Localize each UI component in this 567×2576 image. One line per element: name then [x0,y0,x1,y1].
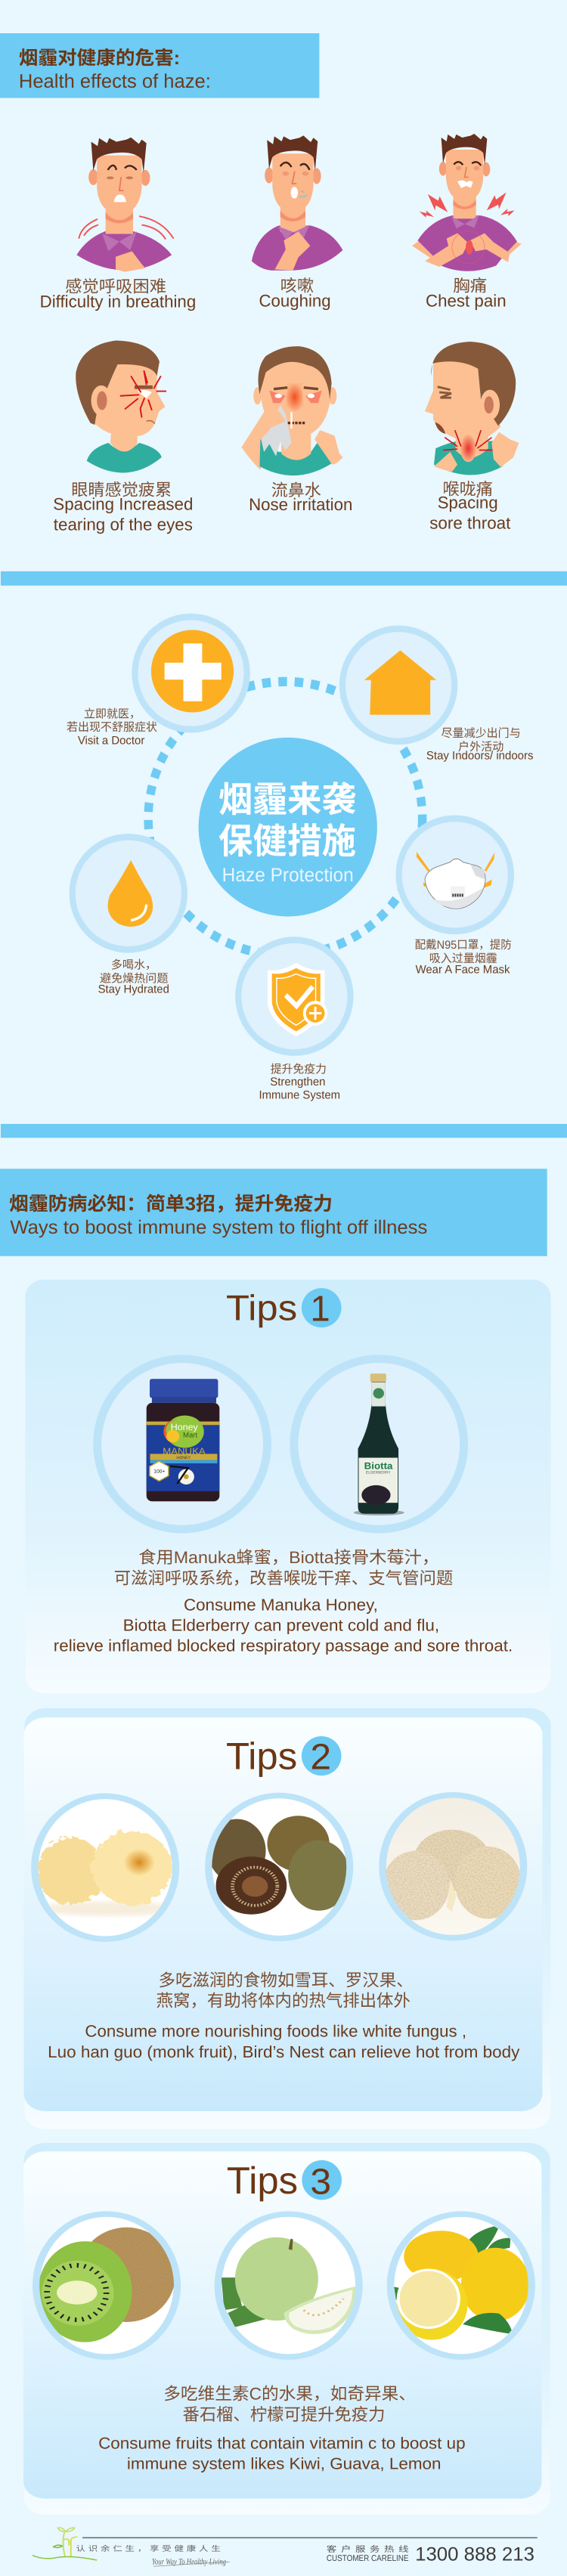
figure: sore throat [425,342,519,475]
label: chest pain: 胸痛 [453,276,487,295]
tips 1 heading [226,1288,342,1329]
label: nose irritation: Nose irritation [249,494,352,514]
heading band: ways to boost immune system: 烟霾防病必知：简单3招，提升免疫力 [9,1193,333,1214]
photo: kiwi [36,2214,177,2357]
label: nose irritation: 流鼻水 [271,481,321,500]
label: coughing: 咳嗽 [280,276,314,295]
label: chest pain: Chest pain [426,291,507,310]
measure: stay indoors: Stay Indoors/ indoors [426,749,533,762]
measure: stay hydrated: 避免燥热问题 [100,972,168,985]
measure: wear a face mask: 配戴N95口罩，提防 [415,939,512,951]
figure: difficulty in breathing [76,138,174,272]
tips 3 text [98,2384,466,2472]
label: eye fatigue: Spacing Increased [53,494,193,513]
product: manuka honey jar: MANUKA [163,1446,206,1457]
label: sore throat [429,479,510,532]
tips 1 text: 可滋润呼吸系统，改善喉咙干痒、支气管问题 [114,1569,453,1588]
photo: bird's nest [383,1795,524,1938]
tagline: 认识余仁生，享受健康人生 [76,2544,221,2553]
tips 3 heading: Tips [227,2160,298,2202]
footer [33,2528,538,2566]
heading band: health effects [0,33,319,98]
measure: visit a doctor [67,617,247,747]
section: tips 3 and footer [23,2143,550,2566]
label: sore throat: sore throat [429,513,510,532]
centre circle: haze protection [199,738,377,916]
product: manuka honey jar: Mart [183,1432,197,1439]
centre circle: haze protection: 烟霾来袭 [218,780,356,819]
label: difficulty in breathing: 感觉呼吸困难 [65,277,166,296]
panel: tips 1 [25,1280,550,1693]
tips 3 heading: 3 [310,2161,331,2202]
product: biotta elderberry bottle: ELDERBERRY [366,1471,391,1475]
panel: tips 3 [23,2143,550,2515]
section: tips 2 [24,1708,550,2129]
measure: stay hydrated [73,837,184,995]
logo: green sprout [33,2528,97,2560]
footer rule [82,2537,538,2538]
heading band: ways to boost immune system: Ways to boost immune system to flight off illness [10,1217,427,1238]
tips 1 text: 食用Manuka蜂蜜，Biotta接骨木莓汁， [138,1548,439,1567]
product: biotta elderberry bottle [294,1359,464,1529]
heading band: health effects: 烟霾对健康的危害: [19,48,180,69]
product: manuka honey jar [98,1359,267,1529]
photo: guava [218,2214,359,2357]
heading band: health effects: Health effects of haze: [19,70,211,92]
product: biotta elderberry bottle: Biotta [364,1460,393,1471]
tagline: Your Way To Healthy Living [152,2556,226,2566]
customer careline: 1300 888 213 [415,2543,534,2565]
product: manuka honey jar: HONEY [176,1456,191,1460]
tagline [76,2544,230,2566]
bottom divider band [1,1124,567,1138]
section: heading and tips 1 [0,1169,550,1693]
label: chest pain [426,276,507,310]
measure: visit a doctor: 立即就医， [84,707,141,720]
figure: nose irritation [242,346,342,475]
label: eye fatigue: tearing of the eyes [54,515,193,534]
measure: wear a face mask: Wear A Face Mask [416,963,510,976]
section: health effects of haze [0,33,522,534]
customer careline: CUSTOMER CARELINE [327,2553,408,2563]
tips 1 text: relieve inflamed blocked respiratory passage and sore throat. [54,1636,513,1655]
measure: wear a face mask [399,819,512,976]
label: sore throat: 喉咙痛 [442,479,493,498]
measure: stay hydrated: 多喝水， [111,958,156,971]
tips 3 text: Consume fruits that contain vitamin c to boost up [98,2434,466,2452]
customer careline [327,2543,534,2565]
centre circle: haze protection: Haze Protection [222,864,354,886]
tips 1 text: Biotta Elderberry can prevent cold and flu, [123,1616,439,1634]
label: coughing: Coughing [259,291,331,310]
figure: chest pain [412,134,522,271]
label: sore throat: Spacing [438,493,498,512]
heading band: ways to boost immune system [0,1169,547,1256]
figure: coughing [252,135,342,271]
tips 2 heading: Tips [226,1735,297,1777]
tips 1 text [54,1548,513,1655]
tips 2 text: Consume more nourishing foods like white fungus , [85,2022,466,2041]
measure: visit a doctor: Visit a Doctor [78,734,144,747]
measure: visit a doctor: 若出现不舒服症状 [67,721,157,734]
customer careline: 客户服务热线 [327,2544,408,2553]
photo: monk fruit [208,1795,350,1939]
measure: stay indoors: 户外活动 [458,741,503,754]
measure: stay hydrated: Stay Hydrated [98,983,169,995]
label: eye fatigue [53,480,193,534]
dashed ring connecting measures [148,682,423,955]
section: haze protection diagram [1,571,567,1138]
measure: strengthen immune system: 提升免疫力 [271,1063,327,1076]
measure: wear a face mask: 吸入过量烟霾 [429,952,497,965]
top divider band [1,571,567,586]
tips 2 text: 多吃滋润的食物如雪耳、罗汉果、 [158,1971,414,1989]
label: nose irritation [249,481,352,514]
tips 1 heading: Tips [226,1288,297,1328]
label: difficulty in breathing: Difficulty in breathing [40,292,196,311]
product: manuka honey jar: Honey [171,1422,198,1432]
product: manuka honey jar: 100+ [153,1469,165,1474]
measure: strengthen immune system: Strengthen [270,1076,325,1088]
photo: white fungus [35,1796,177,1939]
centre circle: haze protection: 保健措施 [218,822,356,861]
label: eye fatigue: 眼睛感觉疲累 [71,480,172,499]
label: coughing [259,276,331,310]
tips 3 text: immune system likes Kiwi, Guava, Lemon [127,2454,442,2472]
tips 3 text: 多吃维生素C的水果，如奇异果、 [163,2384,416,2403]
photo: lemons [391,2214,531,2357]
measure: strengthen immune system: Immune System [259,1088,340,1101]
measure: stay indoors: 尽量减少出门与 [442,727,521,740]
measure: strengthen immune system [238,940,350,1101]
tips 2 text [48,1971,520,2061]
panel: tips 2 [24,1708,550,2129]
figure: eye fatigue [76,341,166,472]
label: difficulty in breathing [40,277,196,311]
tips 2 heading: 2 [310,1736,331,1777]
measure: stay indoors [342,629,533,762]
tips 1 heading: 1 [310,1288,330,1329]
tips 2 text: 燕窝，有助将体内的热气排出体外 [156,1991,411,2010]
tips 3 text: 番石榴、柠檬可提升免疫力 [183,2405,385,2424]
tips 1 text: Consume Manuka Honey, [184,1596,378,1614]
